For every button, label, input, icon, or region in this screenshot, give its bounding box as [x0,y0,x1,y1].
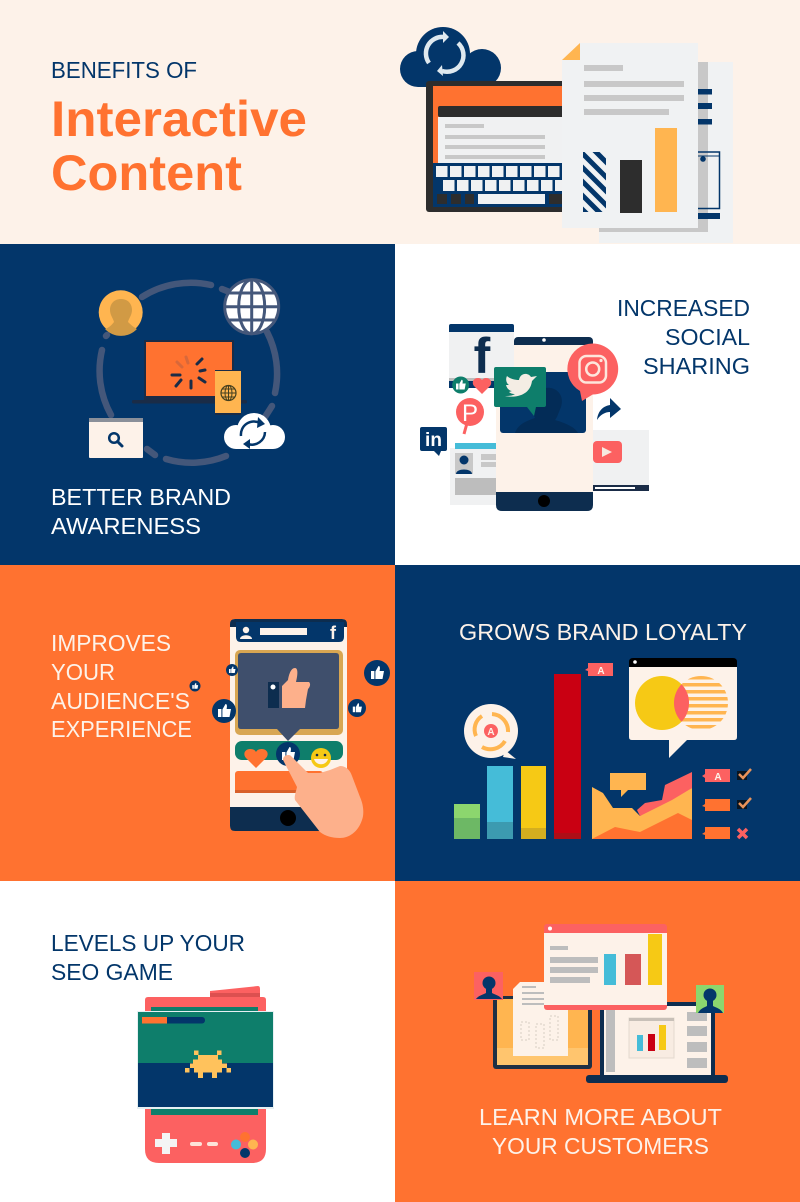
icon: floating likes [190,660,390,723]
icon: video card [593,430,649,491]
icon: game console [137,986,274,1163]
orbit ring [100,283,277,463]
label: improves your audience's experience [51,630,192,742]
icon: linkedin: in [425,430,442,451]
label: improves your audience's experience: AUDIENCE'S [51,688,190,714]
panel: header [0,0,800,244]
bar chart [454,674,581,839]
title: Interactive [51,91,307,147]
icon: monitor with spinner [132,340,247,404]
label: increased social sharing: SHARING [643,353,750,379]
icon: search window [89,418,143,458]
icon: profile card [450,443,496,505]
label: levels up your seo game: LEVELS UP YOUR [51,930,245,956]
panel: improves audience experience [0,565,395,881]
title: Content [51,145,242,201]
icon: front document with bar chart [562,43,698,242]
label: learn more about your customers: LEARN MORE ABOUT [479,1104,722,1130]
heading: benefits of: BENEFITS OF [51,57,197,83]
icon: venn window [629,658,737,758]
label: increased social sharing: INCREASED [617,295,750,321]
icon: twitter bubble [494,367,546,416]
icon: heart badge [473,378,491,394]
icon: cycle bubble [464,704,518,759]
icon: phone with globe [215,370,241,415]
icon: facebook card [449,324,514,388]
icon: linkedin [420,427,447,456]
label: levels up your seo game: SEO GAME [51,959,173,985]
icon: pinterest [456,398,484,434]
icon: pinterest: P [462,400,478,427]
label: learn more about your customers: YOUR CUSTOMERS [492,1133,709,1159]
label: better brand awareness: AWARENESS [51,513,201,539]
icon: right laptop [586,1002,728,1083]
label: improves your audience's experience: EXPERIENCE [51,716,192,742]
tag: A [585,663,613,677]
icon: cloud sync [400,27,501,87]
panel: better brand awareness [0,244,395,565]
icon: user avatar [99,290,143,336]
tag: A: A [597,666,605,677]
panel: levels up your seo game [0,881,395,1202]
icon: instagram bubble [567,344,618,401]
icon: document [513,982,568,1056]
label: learn more about your customers [479,1104,722,1159]
label: improves your audience's experience: YOUR [51,659,115,685]
icon: smartphone [230,619,347,831]
label: increased social sharing: SOCIAL [665,324,750,350]
icon: smartphone: f [330,623,337,643]
icon: left tablet [493,996,592,1069]
label: improves your audience's experience: IMPROVES [51,630,171,656]
label: better brand awareness [51,484,231,539]
icon: back document [599,62,733,243]
label: grows brand loyalty: GROWS BRAND LOYALTY [459,619,747,645]
speech bubble [610,773,646,797]
icon: pointing hand [283,755,363,838]
area chart [592,772,692,839]
icon: green avatar [696,985,724,1013]
panel: grows brand loyalty [395,565,800,881]
icon: cycle bubble: A [487,727,495,738]
icon: tablet [496,337,593,511]
icon: facebook card: f [474,328,491,384]
panel: increased social sharing [395,244,800,565]
icon: share arrow [597,398,621,420]
icon: laptop [426,81,566,212]
icon: white cloud sync [224,413,285,449]
title [51,91,307,201]
label: increased social sharing [617,295,750,379]
checklist: A [714,772,722,783]
icon: report window [544,924,667,1010]
icon: coral avatar [474,972,503,1000]
checklist [702,769,751,839]
icon: globe [225,280,279,334]
panel: learn more about your customers [395,881,800,1202]
label: better brand awareness: BETTER BRAND [51,484,231,510]
icon: like badge [452,376,469,394]
label: levels up your seo game [51,930,245,985]
